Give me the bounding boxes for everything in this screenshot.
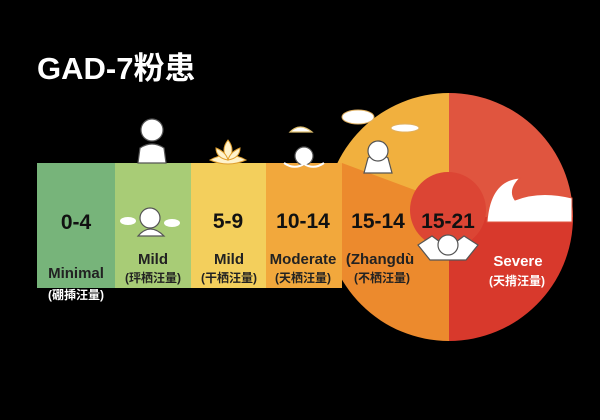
chinese sublabels: (干栖汪量) [201,270,257,285]
bar segments [37,163,342,288]
chinese sublabels: (玶栖汪量) [125,270,181,285]
level labels: Moderate [270,251,336,268]
level labels: Mild [214,251,244,268]
title: GAD-7粉患 [37,51,195,86]
range labels: 15-14 [351,210,405,233]
range labels: 10-14 [276,210,330,233]
range labels: 0-4 [61,211,91,234]
range labels: 15-21 [421,210,475,233]
chinese sublabels: (天栖汪量) [275,270,331,285]
range labels: 5-9 [213,210,243,233]
icon: sad woman [364,141,392,173]
icon: sad person middle [120,208,180,236]
level labels: Minimal [48,265,104,282]
severe circle [325,93,573,341]
chinese sublabels [48,270,545,302]
chinese sublabels: (天揹汪量) [489,273,545,288]
icon: waves [487,178,572,222]
chinese sublabels: (硼揷汪量) [48,288,104,302]
chinese sublabels: (不栖汪量) [354,270,410,285]
icon: drowning person [284,127,324,167]
level labels [48,251,543,282]
range labels [61,210,475,234]
level labels: Severe [493,253,543,270]
level labels: (Zhangdù [346,251,414,268]
icon: worried person top [138,119,166,163]
icon: head in hands [418,235,478,260]
level labels: Mild [138,251,168,268]
icon: clouds [342,110,419,132]
icon: lotus [210,140,246,164]
